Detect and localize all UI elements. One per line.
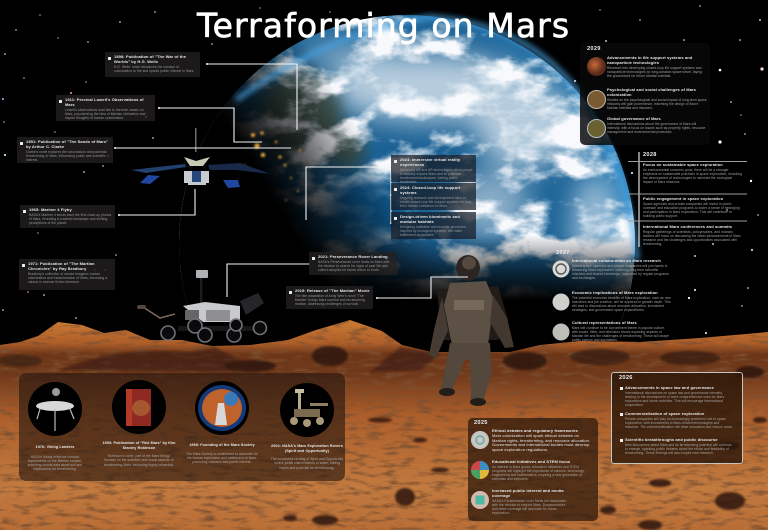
event: Mariner 4 [20,205,115,228]
item: ethics: Mars colonization will spark ethical debates on Martian rights, terraforming, and resource allocation. Governments and international bodies must develop space exploration regulations. [492,433,590,452]
event: Sands of Mars: 1951: Publication of "The Sands of Mars" by Arthur C. Clarke [26,139,108,149]
event: Habitats: Design-driven biomimetic and modular habitats [400,214,460,224]
milestone: Mars Society: 1998: Founding of the Mars Society [189,443,255,447]
item: life support: Research into developing closed-loop life support systems and nanoparticle technologies for long-duration space travel, laying the groundwork for future Martian habitats. [607,66,702,78]
event: The Martian: The film adaptation of Andy Weir's novel "The Martian" brings Mars survival and terraforming realism, addressing challenges of survival. [295,294,365,306]
panel: 2028 [643,152,742,246]
panel: 2026 [611,372,743,464]
milestone: Red Mars: Robinson's novel, part of the Mars trilogy, focuses on the scientific and social aspects of terraforming Mars, becoming highly influential. [104,454,174,467]
year 2026: 2026 [619,375,633,381]
milestone: Spirit and Opportunity: 2004: NASA's Mars Exploration Rovers (Spirit and Opportunity) [271,444,343,453]
event: The Martian [286,286,373,309]
title: Terraforming on Mars [197,6,570,45]
panel: 2025 [468,418,598,521]
milestone: Spirit and Opportunity [270,383,344,470]
item: governance: Global governance of Mars [607,116,661,121]
item: commercialization: Commercialization of space exploration [625,411,704,416]
event: War of the Worlds [105,52,200,77]
item: education: Educational initiatives and STEM focus [492,459,570,464]
event: Life support: Ongoing research and development aims to create closed-loop life support systems for long-term human habitation on Mars. [400,196,473,208]
item: cultural: Cultural representations of Mars [572,320,637,325]
event: Habitats: Designing habitable and modular structures, inspired by ecological systems, will make settlement sustainable. [400,225,467,237]
item: governance [587,116,706,138]
milestone: Red Mars [102,380,176,467]
year 2025: 2025 [474,420,488,426]
item: economic: The potential economic benefits of Mars exploration, such as new industries and job creation, will be explored in greater depth. This will lead to discussions about resource allocation, investment strategies, and government space expenditures. [572,296,671,312]
mars ground [0,318,768,530]
item: economic: Economic implications of Mars exploration [572,290,658,295]
item: sustainable exploration: As environmental concerns grow, there will be a stronger emphasis on sustainable practices in space exploration, including the development of technologies to minimize the ecological impact of Mars missions. [643,168,742,184]
event: Mariner 4: 1965: Mariner 4 Flyby [29,207,72,212]
year 2029: 2029 [587,46,601,52]
event: Lowell observations: Lowell's observations lead him to theorize canals on Mars, popularizing the idea of Martian civilization and inspire thoughts of human colonization. [65,108,145,120]
event: Martian Chronicles: 1971: Publication of "The Martian Chronicles" by Ray Bradbury [28,261,95,271]
item: public engagement: Space agencies and private companies will invest in public outreach and education programs to foster a sense of belonging and participation in Mars exploration. This will contribute to building public support. [643,202,740,218]
item: law: International discussions on space law and governance intensify, leading to the development of more comprehensive rules for Mars exploration and future activities. This will encourage international cooperation. [625,391,724,407]
event: VR experiences [391,155,476,182]
item: collaboration: International collaboration on Mars research [572,258,661,263]
item: science: New discoveries about Mars and its terraforming potential will continue to emerge, sparking public debates about the ethics and feasibility of terraforming. These findings will also inspire new research. [625,443,732,455]
event: Habitats [391,212,476,239]
item: conferences: International Mars conferences and summits [643,224,732,229]
milestone: Spirit and Opportunity: The successful landing of Spirit and Opportunity rovers yields vital evidence of water, fueling hopes and potential for terraforming. [271,457,343,470]
event: Lowell observations: 1911: Percival Lowell's Observations of Mars [65,97,144,107]
item: cultural: Mars will continue to be a prominent theme in popular culture, with books, films, and television shows exploring aspects of Martian life and the challenges of terraforming. These will shape public opinion and aspirations. [572,326,669,342]
event: Lowell observations [56,95,155,121]
milestone: Red Mars: 1993: Publication of "Red Mars" by Kim Stanley Robinson [102,441,176,450]
event: Life support: 2024: Closed-loop life support systems [400,185,460,195]
item: economic [552,290,671,312]
milestone: Mars Society [186,381,258,464]
item: psychological [587,87,707,110]
item: public engagement: Public engagement in space exploration [643,196,723,201]
event: The Martian: 2015: Release of "The Martian" Movie [295,288,370,293]
item: collaboration [552,258,669,280]
item: life support: Advancements in life support systems and nanoparticle technologies [607,55,692,65]
event: War of the Worlds: 1898: Publication of "The War of the Worlds" by H.G. Wells [114,54,186,64]
milestone: Viking Landers [28,382,82,471]
item: collaboration: Global space agencies and private companies will join hands in advancing Mars exploration, fostering long-term scientific missions and shared knowledge, supported by regular programs and exchanges. [572,264,669,280]
event: Mariner 4: NASA's Mariner 4 sends back the first close-up photos of Mars, revealing a cratered landscape and shifting perceptions of the planet. [29,213,111,225]
item: education [471,459,585,481]
event: War of the Worlds: H.G. Wells' novel introduces the concept of colonization to the and sparks public interest in Mars. [114,65,194,73]
satellite [131,128,271,188]
panel: 2029 [580,43,710,145]
item: media: NASA's Perseverance rover feeds the fascination with the mission to explore Mars. Documentaries and news coverage will advocate for future exploration. [492,499,566,515]
item: sustainable exploration: Focus on sustainable space exploration [643,162,723,167]
item: life support [587,55,702,78]
rover [137,270,266,342]
event: Perseverance: 2021: Perseverance Rover Landing [318,254,388,259]
event: Martian Chronicles: Bradbury's collection of stories imagines human colonization and transformation of Mars, becoming a classic in science fiction literature. [28,272,107,284]
item: conferences: Regular gatherings of scientists, policymakers, and industry leaders will focus on discussing the latest advancements in Mars research and the challenges and opportunities associated with terraforming. [643,230,741,246]
item: science: Scientific breakthroughs and public discourse [625,437,718,442]
item: ethics [471,428,590,452]
item: media [471,488,566,515]
year 2027: 2027 [556,250,570,256]
item: commercialization: Private companies will play an increasingly prominent role in space exploration, with investments in Mars-related technologies and missions. The commercialization will drive innovation and reduce costs. [625,417,733,429]
event: VR experiences: 2024: Immersive virtual reality experiences [400,157,460,167]
item: cultural [552,320,669,342]
panel: 2027 [552,250,671,342]
item: law: Advancements in space law and governance [625,385,714,390]
panel: historic milestones [19,373,345,481]
event: Sands of Mars [17,137,113,163]
earth globe [170,0,650,330]
event: Life support [391,183,476,210]
event: Perseverance: NASA's Perseverance rover lands on Mars with the mission to search for signs of past life and collect samples for future return to Earth. [318,260,389,272]
event: VR experiences: Advanced VR and AR technologies allow people to virtually explore Mars and its potential terraformed landscapes, fueling public excitement. [400,168,473,184]
event: Perseverance [309,252,397,275]
milestone: Viking Landers: 1976: Viking Landers [36,445,74,449]
atmosphere glow [236,17,637,260]
item: education: As interest in Mars grows, education initiatives and STEM programs will highlight the importance of science, technology, engineering and mathematics, inspiring a new generation of scientists and explorers. [492,465,585,481]
milestone: Viking Landers: NASA's Viking missions conduct experiments on the Martian surface, providing crucial data about soil and implications for terraforming. [28,455,82,471]
item: ethics: Ethical debates and regulatory frameworks [492,428,578,433]
item: governance: International discussions about the governance of Mars will intensify, with a focus on issues such as property rights, resource management and environmental protection. [607,122,705,134]
item: media: Increased public interest and media coverage [492,488,564,498]
astronaut [429,255,514,406]
connector lines [115,64,747,298]
year 2028: 2028 [643,152,657,158]
city lights [244,131,301,201]
starfield [2,5,764,334]
item: psychological: Psychological and social challenges of Mars colonization [607,87,696,97]
item: psychological: Studies on the psychological and social impact of long-term space missions will gain prominence, informing the design of future Martian habitats and missions. [607,98,707,110]
event: Sands of Mars: Clarke's novel explores the colonization and potential terraforming of Mars, influencing public and scientific interest. [26,150,106,162]
milestone: Mars Society: The Mars Society is established to advocate for the human exploration and settlement of Mars, promoting research and public interest. [186,452,258,464]
event: Martian Chronicles [19,259,115,290]
